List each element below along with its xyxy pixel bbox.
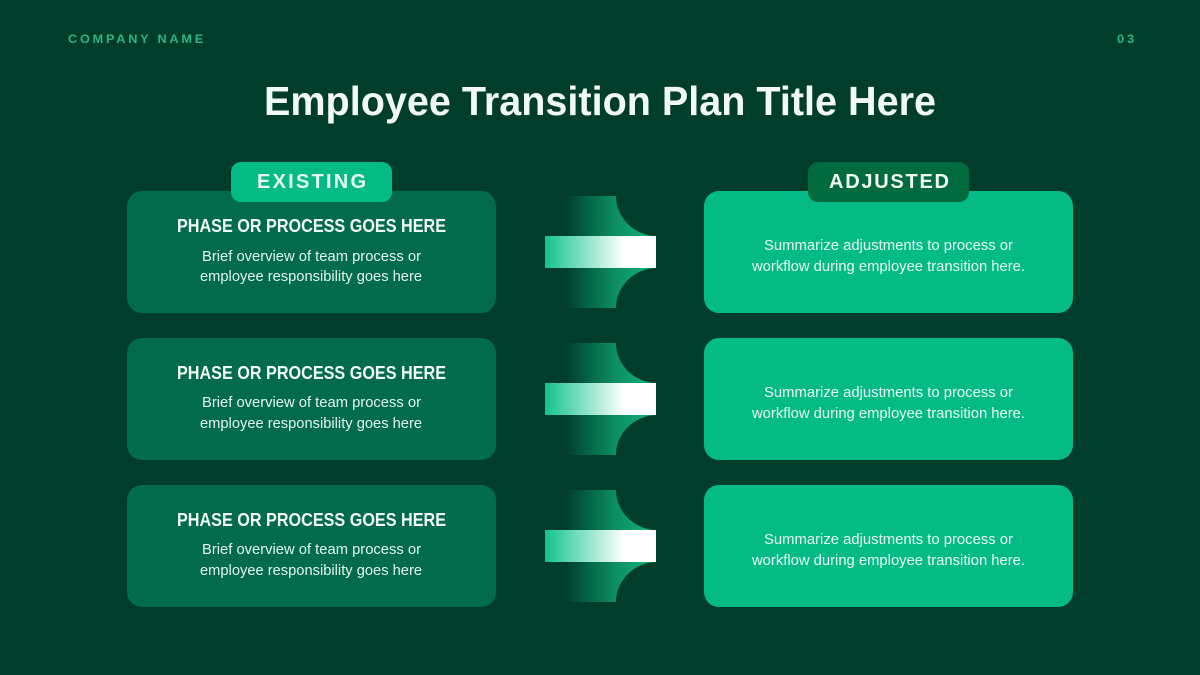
badge: adjusted: ADJUSTED [829,171,949,193]
adjusted 1 description: Summarize adjustments to process or [764,238,1013,254]
adjusted 1 description [751,238,1025,275]
badge: existing [231,162,392,202]
adjusted 2 description: Summarize adjustments to process or [764,385,1013,401]
page number: 03 [1117,34,1137,46]
phase 1 description [200,249,422,285]
adjusted 2 description [751,385,1025,422]
panel: adjusted 3 [704,485,1073,607]
arrow 3 [545,490,656,602]
arrow 2 [545,343,656,455]
panel: adjusted 1 [704,191,1073,313]
phase 1 description: employee responsibility goes here [200,269,422,285]
phase 3 description: Brief overview of team process or [202,542,421,558]
panel: existing phase 3 [127,485,496,607]
badge: adjusted [808,162,969,202]
badge: existing: EXISTING [257,171,366,193]
adjusted 3 description [751,532,1025,569]
panel: existing phase 2 [127,338,496,460]
phase 1 description: Brief overview of team process or [202,249,421,265]
phase 3 description: employee responsibility goes here [200,563,422,579]
phase 3 heading: PHASE OR PROCESS GOES HERE [177,510,446,530]
company name: COMPANY NAME [68,34,206,46]
panel: adjusted 2 [704,338,1073,460]
phase 2 description: Brief overview of team process or [202,395,421,411]
title: Employee Transition Plan Title Here [264,78,936,124]
phase 2 heading: PHASE OR PROCESS GOES HERE [177,363,446,383]
adjusted 1 description: workflow during employee transition here. [751,259,1025,275]
adjusted 3 description: Summarize adjustments to process or [764,532,1013,548]
phase 3 description [200,542,422,579]
adjusted 3 description: workflow during employee transition here. [751,553,1025,569]
phase 2 description: employee responsibility goes here [200,416,422,432]
adjusted 2 description: workflow during employee transition here. [751,406,1025,422]
arrow 1 [545,196,656,308]
panel: existing phase 1 [127,191,496,313]
phase 2 description [200,395,422,432]
phase 1 heading: PHASE OR PROCESS GOES HERE [177,216,446,236]
